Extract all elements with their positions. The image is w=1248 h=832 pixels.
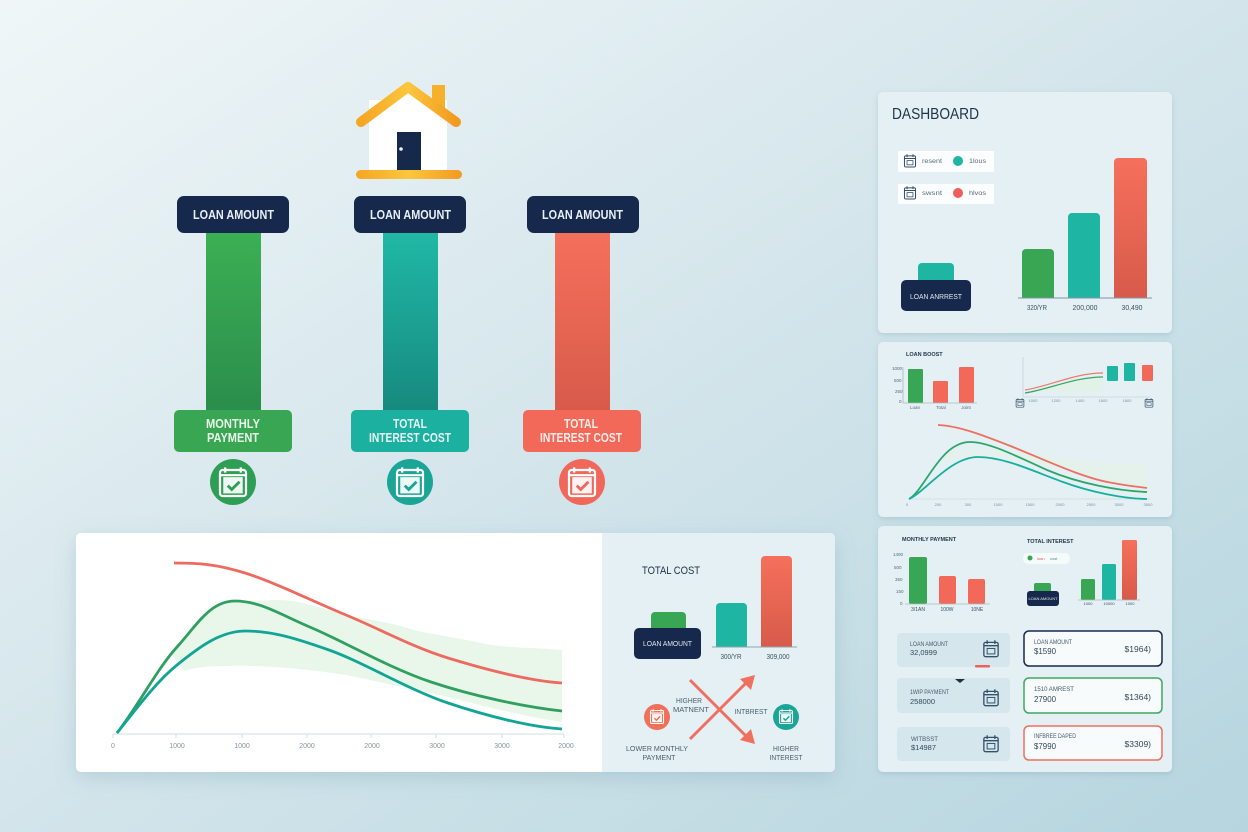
outlined card: interest paid: $3309)	[1125, 739, 1151, 749]
axis labels: 2000	[299, 743, 315, 750]
panel: summary	[878, 526, 1172, 772]
dark accent wedge	[955, 679, 965, 683]
mini bar chart: 250	[895, 389, 903, 394]
mini bar chart: Total	[936, 405, 946, 410]
column header: loan amount	[177, 196, 289, 233]
outlined card: interest paid	[1024, 726, 1162, 760]
column label: monthly payment	[174, 410, 292, 452]
total interest bar chart: cost	[1050, 556, 1058, 561]
outlined card: interest paid: INFBREE DAPED	[1034, 733, 1076, 740]
outlined card: interest paid: $7990	[1034, 742, 1057, 751]
large line chart: 3000	[1115, 502, 1124, 507]
total interest bar chart: 10000	[1103, 601, 1115, 606]
large line chart: 200	[935, 502, 942, 507]
outlined card: total interest: 27900	[1034, 695, 1057, 704]
red accent dash	[975, 665, 990, 668]
monthly payment bar chart: 150	[896, 589, 904, 594]
outlined card: loan amount: LOAN AMOUNT	[1034, 639, 1072, 646]
axis labels: 3000	[429, 743, 445, 750]
column label: total interest cost: TOTAL	[564, 417, 598, 431]
outlined card: loan amount: $1590	[1034, 647, 1057, 656]
mini line chart: 1000	[1029, 398, 1038, 403]
trade-off labels: HIGHER	[676, 696, 703, 705]
total interest bar chart: loan	[1037, 556, 1045, 561]
stat card: interest	[897, 727, 1010, 761]
trade-off labels	[626, 696, 803, 762]
mini line chart: 1400	[1076, 398, 1085, 403]
column header: loan amount: LOAN AMOUNT	[370, 208, 451, 222]
icon: teal calendar	[387, 459, 433, 505]
mini bar chart: 500	[894, 378, 902, 383]
mini line chart: 1200	[1052, 398, 1061, 403]
monthly payment bar chart: 0	[900, 601, 903, 606]
panel: total interest column teal	[351, 196, 469, 505]
panel: dashboard	[878, 92, 1172, 333]
total interest bar chart: 1000	[1084, 601, 1093, 606]
large line chart: 1500	[1026, 502, 1035, 507]
total interest bar chart: TOTAL INTEREST	[1027, 539, 1074, 545]
mini bar chart: 0	[899, 399, 902, 404]
monthly payment bar chart: 1400	[893, 552, 904, 557]
total interest bar chart: 1000	[1126, 601, 1135, 606]
stat card: loan amount	[897, 633, 1010, 667]
icon: green calendar	[210, 459, 256, 505]
monthly payment bar chart	[893, 537, 990, 613]
column label: total interest cost: INTEREST COST	[369, 431, 451, 445]
monthly payment bar chart: 100W	[940, 607, 954, 613]
axis labels: 2000	[364, 743, 380, 750]
column label: monthly payment: MONTHLY	[206, 417, 261, 431]
axis labels: 0	[111, 743, 115, 750]
mini bar chart: LOAN BOOST	[906, 352, 943, 358]
total interest bar chart: LOAN AMOUNT	[1028, 596, 1058, 601]
monthly payment bar chart: 500	[894, 565, 902, 570]
column bar: green	[206, 230, 261, 412]
monthly payment bar chart: 3/1AN	[911, 607, 925, 613]
mini bar chart: Joint	[961, 405, 971, 410]
loan badge: LOAN ANRREST	[910, 292, 962, 301]
trade-off labels: INTBREST	[734, 707, 768, 716]
icon: teal calendar circle	[773, 704, 799, 730]
legend row two	[898, 184, 994, 204]
large line chart: 2500	[1087, 502, 1096, 507]
column bar: red	[555, 230, 610, 412]
legend row one: resent	[922, 158, 942, 165]
large line chart: 0	[906, 502, 909, 507]
trade-off labels: MATNENT	[673, 705, 709, 714]
trade-off labels: HIGHER	[773, 744, 800, 753]
outlined card: total interest	[1024, 678, 1162, 713]
total interest bar chart	[1023, 539, 1140, 606]
icon: red calendar circle	[644, 704, 670, 730]
axis labels	[111, 743, 574, 750]
bar chart: dashboard: 200,000	[1072, 303, 1098, 312]
mini bar chart: Loan	[910, 405, 921, 410]
panel: charts	[878, 342, 1172, 517]
large line chart: 2000	[1056, 502, 1065, 507]
heading: total cost: TOTAL COST	[642, 565, 700, 577]
panel: total interest column red	[523, 196, 641, 505]
large line chart: 3500	[1144, 502, 1153, 507]
monthly payment bar chart: 10NE	[971, 607, 984, 613]
mini line chart: 1600	[1099, 398, 1108, 403]
bar chart: dashboard: 320/YR	[1027, 303, 1047, 312]
outlined card: loan amount	[1024, 631, 1162, 666]
axis labels: 2000	[558, 743, 574, 750]
heading: dashboard: DASHBOARD	[892, 106, 979, 123]
stat card: interest: WITBSST	[911, 736, 938, 743]
trade-off labels: LOWER MONTHLY	[626, 744, 688, 753]
monthly payment bar chart: 350	[895, 577, 903, 582]
stat card: loan amount: 32,0999	[910, 648, 937, 657]
legend row two: hlvos	[969, 190, 987, 197]
icon: house	[356, 85, 462, 179]
column header: loan amount: LOAN AMOUNT	[193, 208, 274, 222]
bar chart: total cost: 309,000	[766, 652, 790, 661]
outlined card: total interest: $1364)	[1125, 692, 1151, 702]
axis labels: 3000	[494, 743, 510, 750]
outlined card: total interest: 1510 AMREST	[1034, 686, 1074, 693]
legend row one: 1lous	[969, 158, 987, 165]
bar chart: total cost: 300/YR	[720, 652, 742, 661]
arrows: crossing trade-off	[690, 675, 755, 744]
stat card: loan amount: LOAN AMOUNT	[910, 641, 948, 648]
trade-off labels: PAYMENT	[642, 753, 676, 762]
large line chart: 300	[965, 502, 972, 507]
bar chart: total cost	[634, 556, 797, 661]
column label: monthly payment: PAYMENT	[207, 431, 259, 445]
icon: red calendar	[559, 459, 605, 505]
panel: main chart and total cost	[76, 533, 835, 772]
mini bar chart: 1000	[892, 366, 903, 371]
trade-off labels: INTEREST	[770, 753, 803, 762]
axis labels: 1000	[234, 743, 250, 750]
large line chart	[906, 425, 1153, 507]
column label: total interest cost	[351, 410, 469, 452]
legend row one	[898, 151, 994, 172]
column label: total interest cost: TOTAL	[393, 417, 427, 431]
stat card: interest: $14987	[911, 743, 936, 752]
column label: total interest cost	[523, 410, 641, 452]
large line chart: 1000	[994, 502, 1003, 507]
panel: monthly payment column	[174, 196, 292, 505]
loan badge	[901, 263, 971, 311]
bar chart: dashboard: 30,490	[1122, 303, 1142, 312]
bar chart: total cost: LOAN AMOUNT	[643, 639, 692, 648]
column header: loan amount	[354, 196, 466, 233]
stat card: monthly payment	[897, 678, 1010, 713]
outlined card: loan amount: $1964)	[1125, 644, 1151, 654]
column bar: teal	[383, 230, 438, 412]
column header: loan amount: LOAN AMOUNT	[542, 208, 623, 222]
line chart	[111, 563, 574, 750]
mini line chart	[1016, 357, 1153, 407]
stat card: monthly payment: 1WIP PAYMENT	[910, 689, 949, 696]
monthly payment bar chart: MONTHLY PAYMENT	[902, 537, 957, 543]
mini line chart: 1800	[1123, 398, 1132, 403]
mini bar chart	[892, 352, 977, 410]
bar chart: dashboard	[1018, 158, 1152, 312]
stat card: monthly payment: 258000	[910, 697, 935, 706]
axis labels: 1000	[169, 743, 185, 750]
column header: loan amount	[527, 196, 639, 233]
legend row two: swsnt	[922, 190, 942, 197]
column label: total interest cost: INTEREST COST	[540, 431, 622, 445]
